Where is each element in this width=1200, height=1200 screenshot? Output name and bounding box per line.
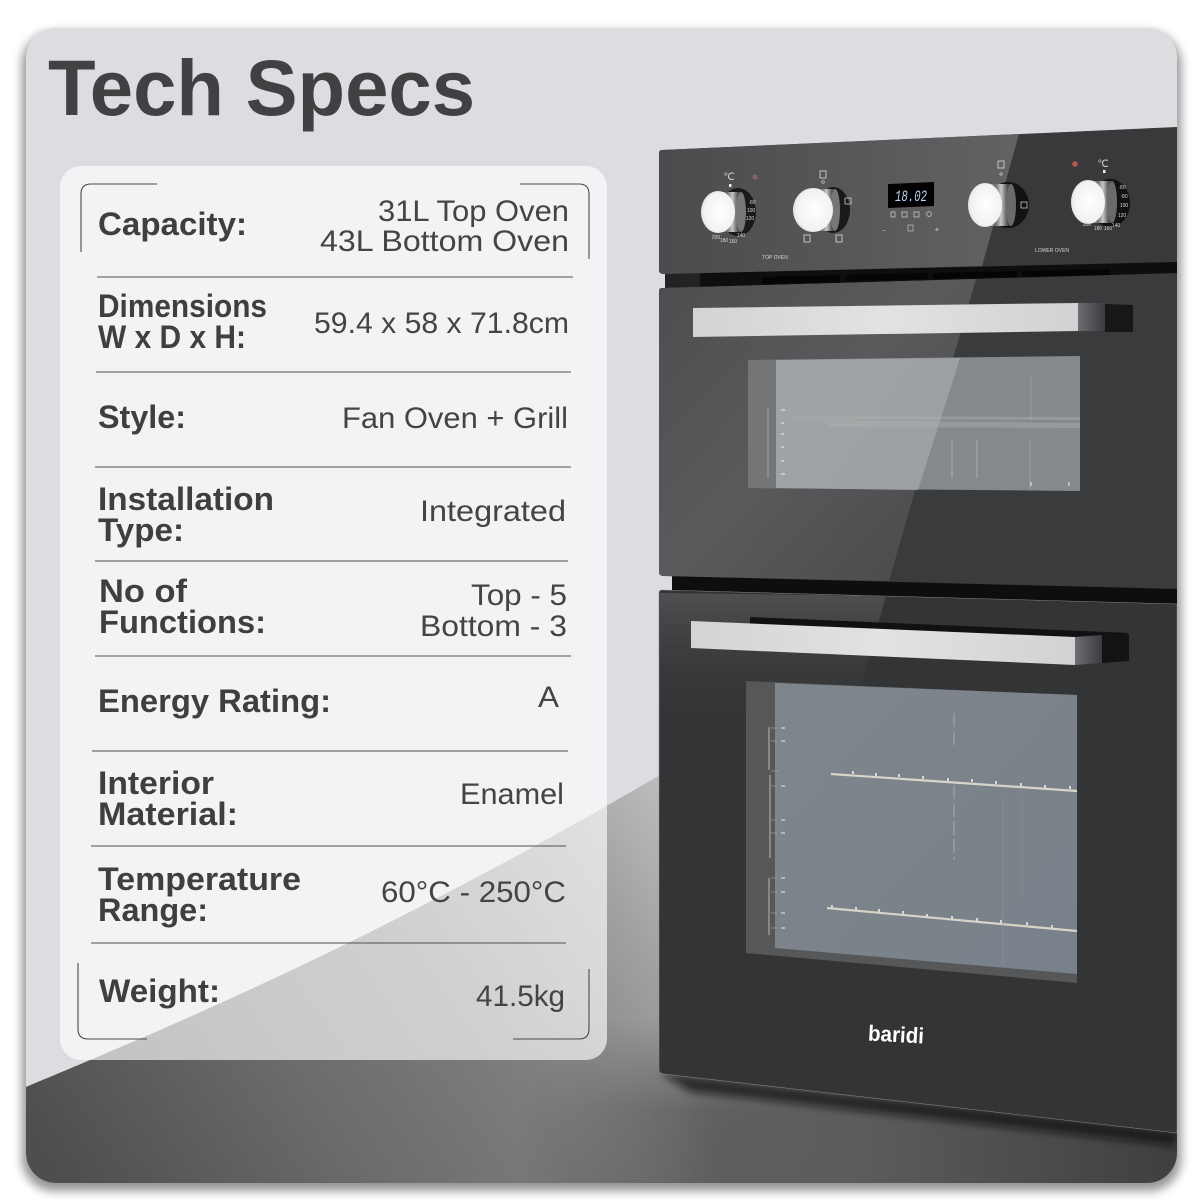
row: interior material: Interior (98, 765, 214, 801)
vent slots (665, 269, 1110, 288)
row: functions: Bottom - 3 (420, 610, 567, 643)
row: weight (99, 973, 565, 1013)
right temperature knob: 200 (1083, 222, 1091, 228)
control panel (659, 127, 1177, 274)
oven racks (768, 713, 1078, 935)
upper door (659, 273, 1177, 589)
row: installation type: Integrated (420, 495, 566, 528)
row dividers (91, 277, 573, 943)
oven body gaps (672, 258, 1177, 612)
digital clock display: + (935, 225, 940, 234)
row: installation type: Type: (98, 512, 184, 548)
right temperature knob: ·80 (1118, 185, 1126, 191)
right temperature knob: ℃ (1097, 159, 1109, 170)
row: dimensions: 59.4 x 58 x 71.8cm (314, 307, 569, 340)
left function knob: TOP OVEN (762, 255, 788, 261)
left temperature knob: ℃ (723, 172, 735, 183)
left temperature knob (701, 172, 758, 245)
digital clock display: 18.02 (895, 188, 927, 206)
row: dimensions: Dimensions (98, 288, 267, 324)
row: style (98, 399, 568, 435)
row: temperature range: 60°C - 250°C (381, 876, 566, 909)
left temperature knob: 100 (747, 208, 755, 214)
row: dimensions (98, 288, 569, 355)
row: installation type (98, 481, 566, 548)
digital clock display (882, 182, 940, 234)
row: interior material (98, 765, 564, 832)
row: weight: Weight: (99, 973, 220, 1009)
row: capacity: 31L Top Oven (378, 195, 569, 228)
left temperature knob: 120 (746, 216, 754, 222)
oven (659, 127, 1177, 1133)
row: interior material: Material: (98, 796, 238, 832)
row: capacity: Capacity: (98, 206, 247, 242)
digital clock display: – (882, 227, 886, 234)
row: functions: Top - 5 (471, 579, 567, 612)
row: interior material: Enamel (460, 778, 564, 811)
lower handle (691, 617, 1129, 665)
lower door (659, 590, 1177, 1133)
row: temperature range (98, 861, 566, 928)
panel: specification table (60, 166, 607, 1060)
row: functions: Functions: (99, 604, 266, 640)
right temperature knob: ·80 (1120, 194, 1128, 200)
row: functions (99, 573, 567, 643)
left temperature knob: 200 (712, 235, 720, 241)
left function knob (762, 171, 851, 261)
diagonal floor gradient (26, 776, 1177, 1183)
right temperature knob: 180 (1094, 226, 1102, 232)
row: energy rating (98, 681, 559, 719)
right temperature knob (1071, 159, 1130, 232)
left temperature knob: ·80 (748, 200, 756, 206)
upper window (748, 356, 1080, 491)
lower window (746, 681, 1077, 983)
row: installation type: Installation (98, 481, 274, 517)
row: style: Style: (98, 399, 186, 435)
right function knob (968, 161, 1069, 254)
row: energy rating: A (538, 681, 559, 714)
right temperature knob: 160 (1104, 226, 1112, 232)
corner brackets (78, 184, 589, 1039)
row: capacity (98, 195, 569, 258)
upper handle (693, 303, 1133, 337)
right function knob: LOWER OVEN (1035, 248, 1069, 254)
left temperature knob: 140 (737, 233, 745, 239)
left temperature knob: 180 (720, 238, 728, 244)
right temperature knob: 120 (1118, 213, 1126, 219)
table background (60, 166, 607, 1060)
left temperature knob: 160 (729, 239, 737, 245)
right temperature knob: 140 (1112, 223, 1120, 229)
brand logo: baridi (867, 1021, 925, 1048)
row: functions: No of (99, 573, 187, 609)
row: energy rating: Energy Rating: (98, 683, 331, 719)
row: weight: 41.5kg (476, 980, 565, 1013)
row: dimensions: W x D x H: (98, 319, 246, 355)
row: style: Fan Oven + Grill (342, 402, 568, 435)
row: temperature range: Range: (98, 892, 208, 928)
right temperature knob: 100 (1120, 203, 1128, 209)
row: capacity: 43L Bottom Oven (320, 225, 569, 258)
title: Tech Specs (48, 43, 475, 132)
row: temperature range: Temperature (98, 861, 301, 897)
